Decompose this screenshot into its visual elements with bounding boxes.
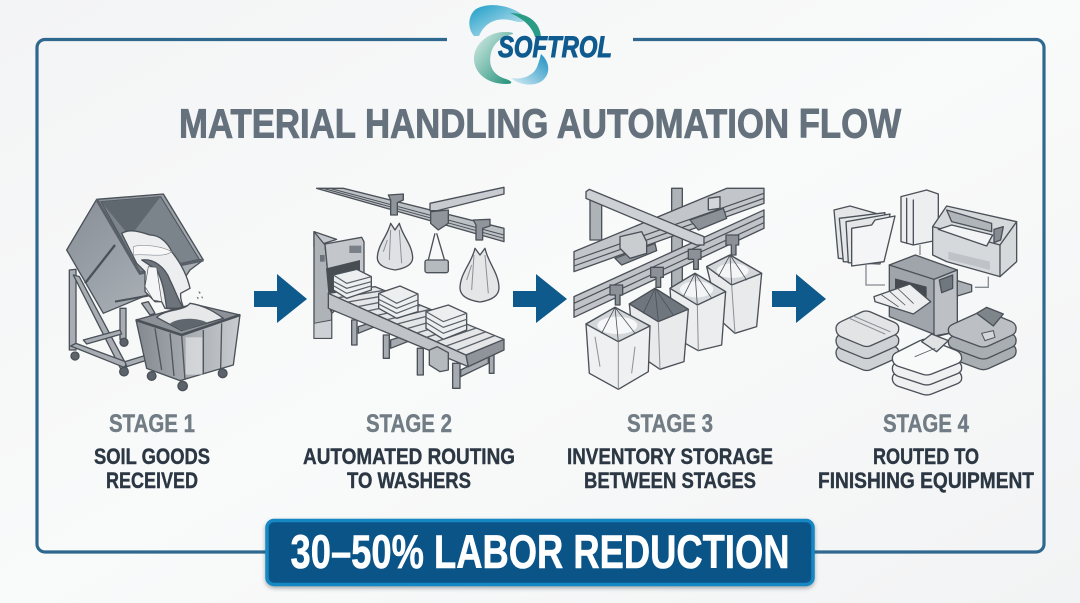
outer frame [37, 40, 1044, 552]
columns [590, 188, 682, 288]
stage 2 caption: TO WASHERS [347, 468, 471, 493]
central conveyor machine [874, 255, 972, 336]
stage 3 caption: BETWEEN STAGES [584, 468, 756, 493]
callout: labor reduction [267, 520, 813, 584]
bag 4 [707, 255, 762, 333]
linen stacks [333, 269, 467, 339]
carriers [610, 197, 739, 305]
conveyor belt [328, 287, 504, 367]
cross beam [586, 189, 704, 245]
grey shirt stack [948, 307, 1016, 370]
file folders [834, 206, 895, 266]
bag 2 [629, 288, 688, 369]
binders [901, 190, 938, 245]
arrow 2 [513, 274, 567, 323]
rear rail [574, 188, 764, 272]
illustration: stage 4 finishing equipment [834, 190, 1017, 395]
front rail [574, 210, 764, 317]
stage 3 caption: STAGE 3 [627, 410, 713, 438]
stage 2 caption: STAGE 2 [366, 410, 452, 438]
logo wordmark: SOFTROL [498, 31, 612, 64]
hopper [67, 194, 203, 313]
stage 1 caption [94, 410, 210, 493]
stage 1 caption: RECEIVED [106, 468, 198, 493]
stage 2 caption: AUTOMATED ROUTING [303, 444, 515, 469]
bag 3 [670, 273, 726, 351]
stage 1 caption: STAGE 1 [109, 410, 195, 438]
stage 3 caption [567, 410, 773, 493]
overhead rail [317, 188, 504, 242]
stage 4 caption: ROUTED TO [873, 444, 979, 469]
bag 1 [586, 307, 650, 389]
laundry [122, 231, 190, 310]
arrow 1 [254, 274, 307, 323]
stage 3 caption: INVENTORY STORAGE [567, 444, 773, 469]
washer [314, 232, 364, 338]
control box [429, 347, 448, 372]
trolleys [388, 194, 490, 240]
tote [425, 233, 448, 273]
conveyor legs [352, 320, 494, 388]
stage 2 caption [303, 410, 515, 493]
illustration: stage 3 overhead storage [574, 188, 764, 389]
bag 2 [460, 248, 499, 302]
towel stack [836, 311, 899, 371]
cart [136, 315, 240, 381]
bag 1 [377, 223, 413, 270]
white shirt stack [892, 334, 962, 395]
stage 4 caption [818, 410, 1034, 493]
illustration: stage 2 overhead bags and conveyor [314, 187, 504, 388]
connectors [866, 245, 988, 287]
title: MATERIAL HANDLING AUTOMATION FLOW [179, 100, 901, 146]
stage 1 caption: SOIL GOODS [94, 444, 210, 469]
stage 4 caption: FINISHING EQUIPMENT [818, 468, 1034, 493]
cross rail [430, 187, 504, 211]
callout: labor reduction: 30–50% LABOR REDUCTION [290, 525, 790, 578]
folding machine [933, 206, 1017, 277]
arrow 3 [772, 274, 826, 323]
logo: Softrol [469, 5, 612, 85]
stage 4 caption: STAGE 4 [883, 410, 969, 438]
frame [69, 269, 155, 376]
illustration: stage 1 tipping hopper and cart [67, 194, 240, 391]
